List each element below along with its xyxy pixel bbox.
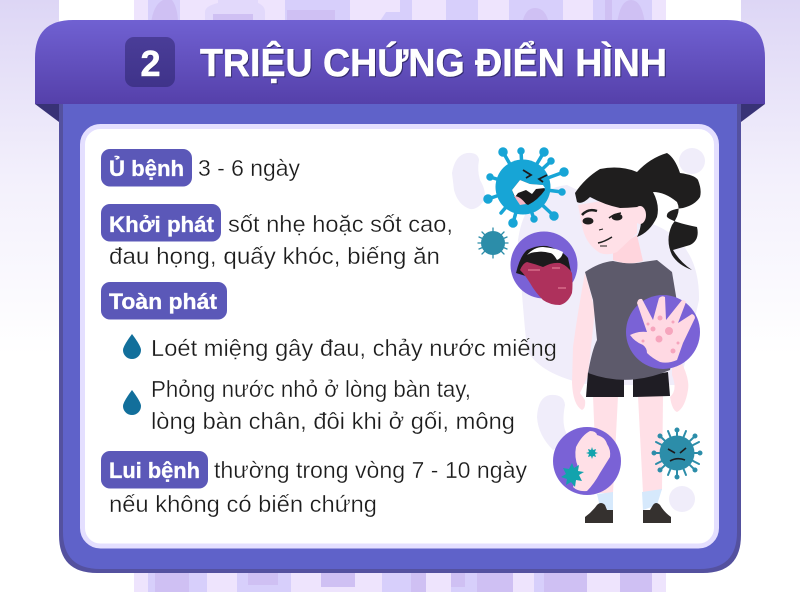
text: Lui bệnh: thường trong vòng 7 - 10 ngày (214, 457, 527, 483)
pill: Ủ bệnh: Ủ bệnh (109, 156, 184, 181)
icon: blue virus (485, 149, 567, 226)
pill: Lui bệnh: Lui bệnh (109, 458, 200, 483)
icon: foot (553, 427, 621, 495)
icon: small teal virus (478, 228, 508, 258)
text: Ủ bệnh (101, 149, 300, 186)
shorts (586, 372, 624, 397)
legs (593, 396, 618, 493)
illustration: girl (572, 153, 701, 523)
text: Khởi phát (101, 204, 453, 269)
text: Lui bệnh: nếu không có biến chứng (109, 491, 377, 517)
bullet: phỏng nước (123, 376, 515, 434)
icon: water drop (123, 334, 141, 359)
shirt (585, 260, 680, 380)
icon: mouth and tongue (510, 232, 578, 305)
bullet: phỏng nước: Phỏng nước nhỏ ở lòng bàn tay, (151, 376, 471, 402)
icon: hand with blisters (626, 295, 700, 369)
pill: Ủ bệnh (101, 149, 192, 186)
text: Lui bệnh (101, 451, 527, 517)
text: Khởi phát: sốt nhẹ hoặc sốt cao, (228, 211, 453, 237)
neck (613, 235, 643, 263)
number badge: 2 (141, 44, 161, 85)
pill: Khởi phát: Khởi phát (109, 212, 214, 237)
illustration backdrop blobs (452, 148, 705, 512)
pill: Khởi phát (101, 204, 221, 242)
icon: frowning teal virus (652, 428, 702, 478)
hair (575, 153, 701, 270)
number badge: 2 (140, 43, 161, 84)
shoes (585, 503, 613, 523)
text: Khởi phát: đau họng, quấy khóc, biếng ăn (109, 243, 440, 269)
ear (634, 206, 646, 224)
pill: Lui bệnh (101, 451, 208, 488)
icon: water drop (123, 390, 141, 415)
face (578, 195, 637, 254)
panel: white content card (82, 126, 716, 546)
bullet: phỏng nước: lòng bàn chân, đôi khi ở gối, mông (151, 408, 515, 434)
text: Ủ bệnh: 3 - 6 ngày (198, 155, 300, 181)
socks (597, 492, 613, 512)
panel: header banner (35, 20, 765, 104)
pill: Toàn phát (101, 282, 227, 320)
pill: Toàn phát: Toàn phát (109, 289, 218, 314)
panel: card body (35, 104, 765, 573)
eyes and mouth (582, 210, 622, 246)
bullet: loét miệng: Loét miệng gây đau, chảy nước miếng (151, 335, 557, 361)
number badge (125, 37, 175, 87)
title: TRIỆU CHỨNG ĐIỂN HÌNH (201, 41, 668, 86)
arms (572, 273, 595, 410)
title: TRIỆU CHỨNG ĐIỂN HÌNH (200, 40, 667, 85)
